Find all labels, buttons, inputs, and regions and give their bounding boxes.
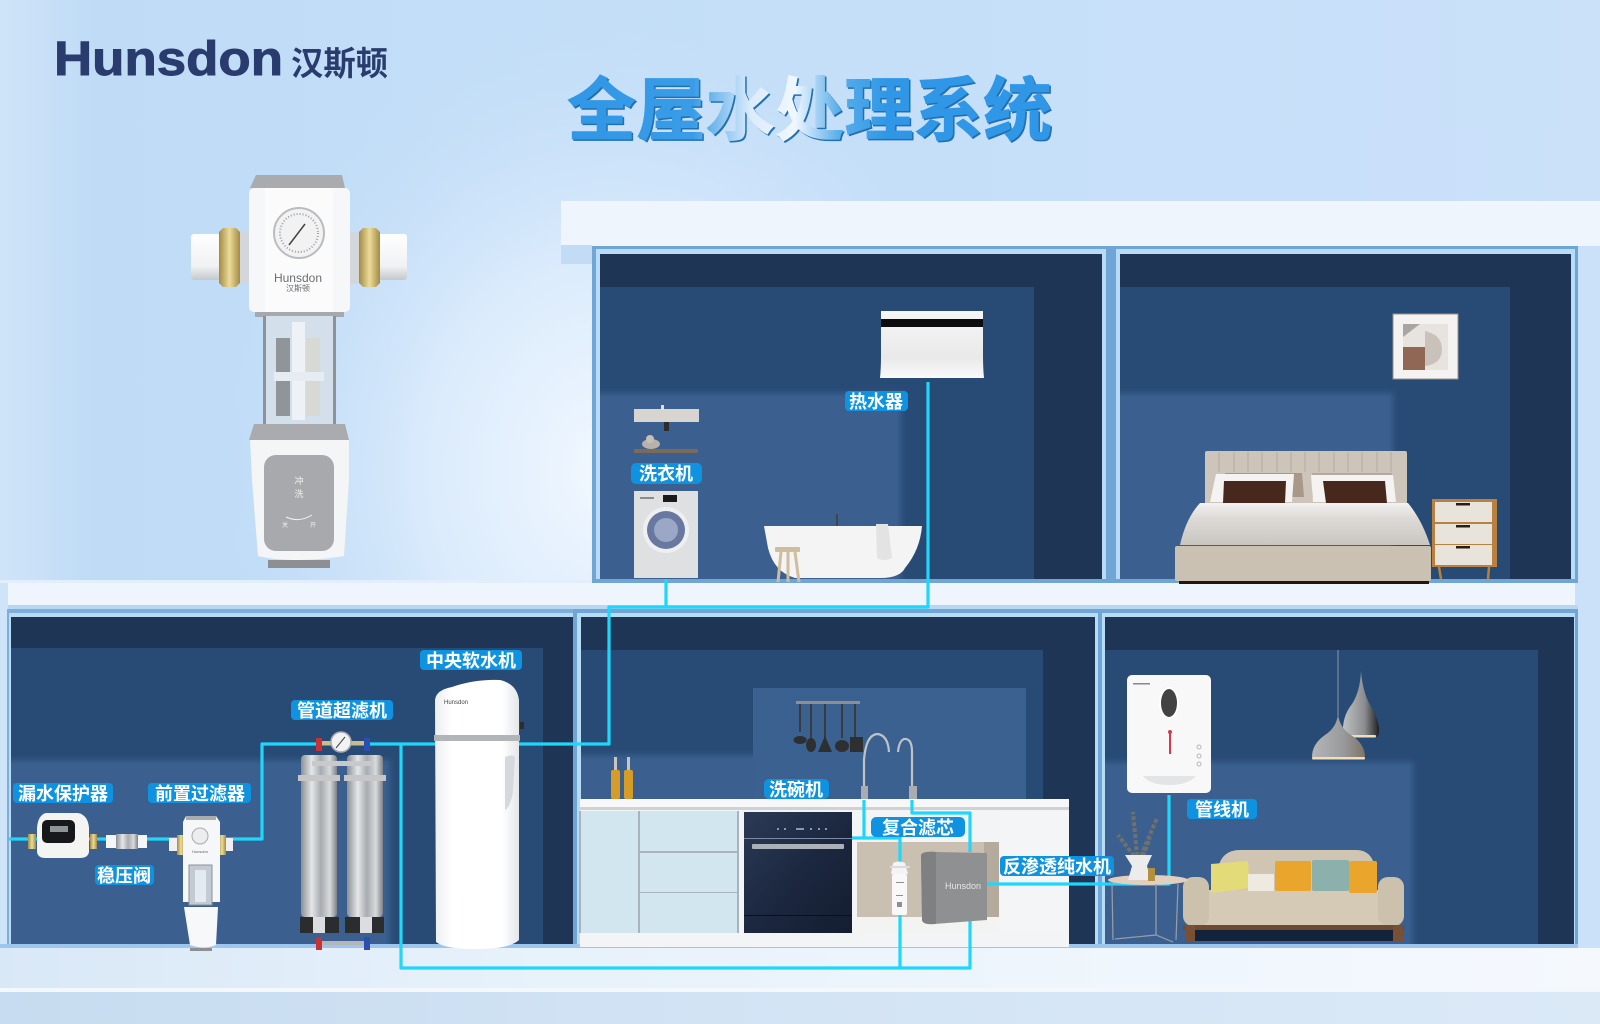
ground floor band [0,944,1600,1024]
product: central water softener [434,680,524,949]
stool [775,547,800,552]
panel: lower room living [1098,609,1578,944]
panel: upper room bedroom [1100,246,1578,603]
label: 管线机: 管线机 [1195,799,1249,820]
logo: Hunsdon [54,33,283,86]
label: 中央软水机: 中央软水机 [426,651,516,671]
steel tubes [301,755,337,917]
product: ultrafiltration machine [298,732,386,950]
soft water loop [401,744,970,968]
washing machine [634,491,698,578]
kitchen items [611,701,917,799]
lower body [249,424,349,440]
logo [54,33,388,86]
control panel [264,455,334,551]
wall picture [1393,314,1458,379]
kitchen cabinets [579,799,1069,947]
product: small front filter: Hunsdon [192,849,208,854]
label: 稳压阀: 稳压阀 [97,865,151,886]
product: small front filter [169,816,233,951]
nightstand [1432,499,1497,579]
water heater [880,311,984,378]
cushions [1211,861,1250,893]
title: 全屋水处理系统 [568,74,1054,150]
title: 全屋水处理系统 [567,72,1052,149]
label: 管道超滤机: 管道超滤机 [297,700,387,721]
mattress [1180,503,1430,545]
gauge [331,732,351,752]
cabinet doors [581,811,737,933]
bed [1175,451,1431,584]
building structure: top slab [561,201,1600,264]
product: reverse osmosis machine: Hunsdon [945,881,981,891]
product: large front filter [191,175,407,568]
label: 漏水保护器: 漏水保护器 [18,784,108,804]
label: 洗衣机: 洗衣机 [639,463,693,484]
product: large front filter: 洗 [294,488,304,499]
product: large front filter: 开 [310,522,316,529]
label: 洗碗机: 洗碗机 [769,779,823,800]
right door [1000,812,1066,932]
product: pressure valve [106,834,147,849]
label: 前置过滤器: 前置过滤器 [155,784,245,804]
product: reverse osmosis machine [921,852,987,924]
glass bowl [255,312,344,317]
pillows [1225,473,1304,497]
panel: lower room utility [0,609,578,970]
side table and plant [1108,812,1188,942]
product: large front filter: 关 [282,521,288,529]
product: large front filter: Hunsdon [274,271,322,285]
black bases [300,917,339,933]
product: large front filter: 冲 [294,475,304,486]
pressure gauge [274,208,324,258]
product: pipeline dispenser [1127,675,1211,793]
water pipes [9,382,1169,968]
clamps [298,775,340,781]
bathtub [764,514,922,582]
bathroom sink shelf [634,405,699,453]
sofa [1183,850,1404,941]
product: composite filter cartridge [890,862,910,915]
label: 反渗透纯水机: 反渗透纯水机 [1003,856,1111,877]
washing machine branch [664,579,668,607]
panel: upper room bathroom [580,246,1110,603]
main water line [9,382,928,839]
manifold and valves [319,741,367,745]
product: leak protector [28,813,97,858]
under-sink alcove [857,842,999,917]
head body [250,175,345,188]
label: 复合滤芯: 复合滤芯 [882,817,954,838]
panel: lower room kitchen [560,609,1098,965]
logo: 汉斯顿 [291,45,388,82]
composite filter branch [852,800,900,968]
product: large front filter: 汉斯顿 [286,283,310,293]
pendant lamps [1312,650,1379,760]
label: 热水器: 热水器 [849,392,903,412]
middle floor slab [0,579,1578,609]
utensils [796,701,860,704]
dishwasher [744,812,852,933]
side pipes [191,234,221,280]
pipeline dispenser line [987,795,1169,884]
faucets [864,734,912,798]
oil bottles [611,770,620,799]
product: central water softener: Hunsdon [444,700,468,706]
